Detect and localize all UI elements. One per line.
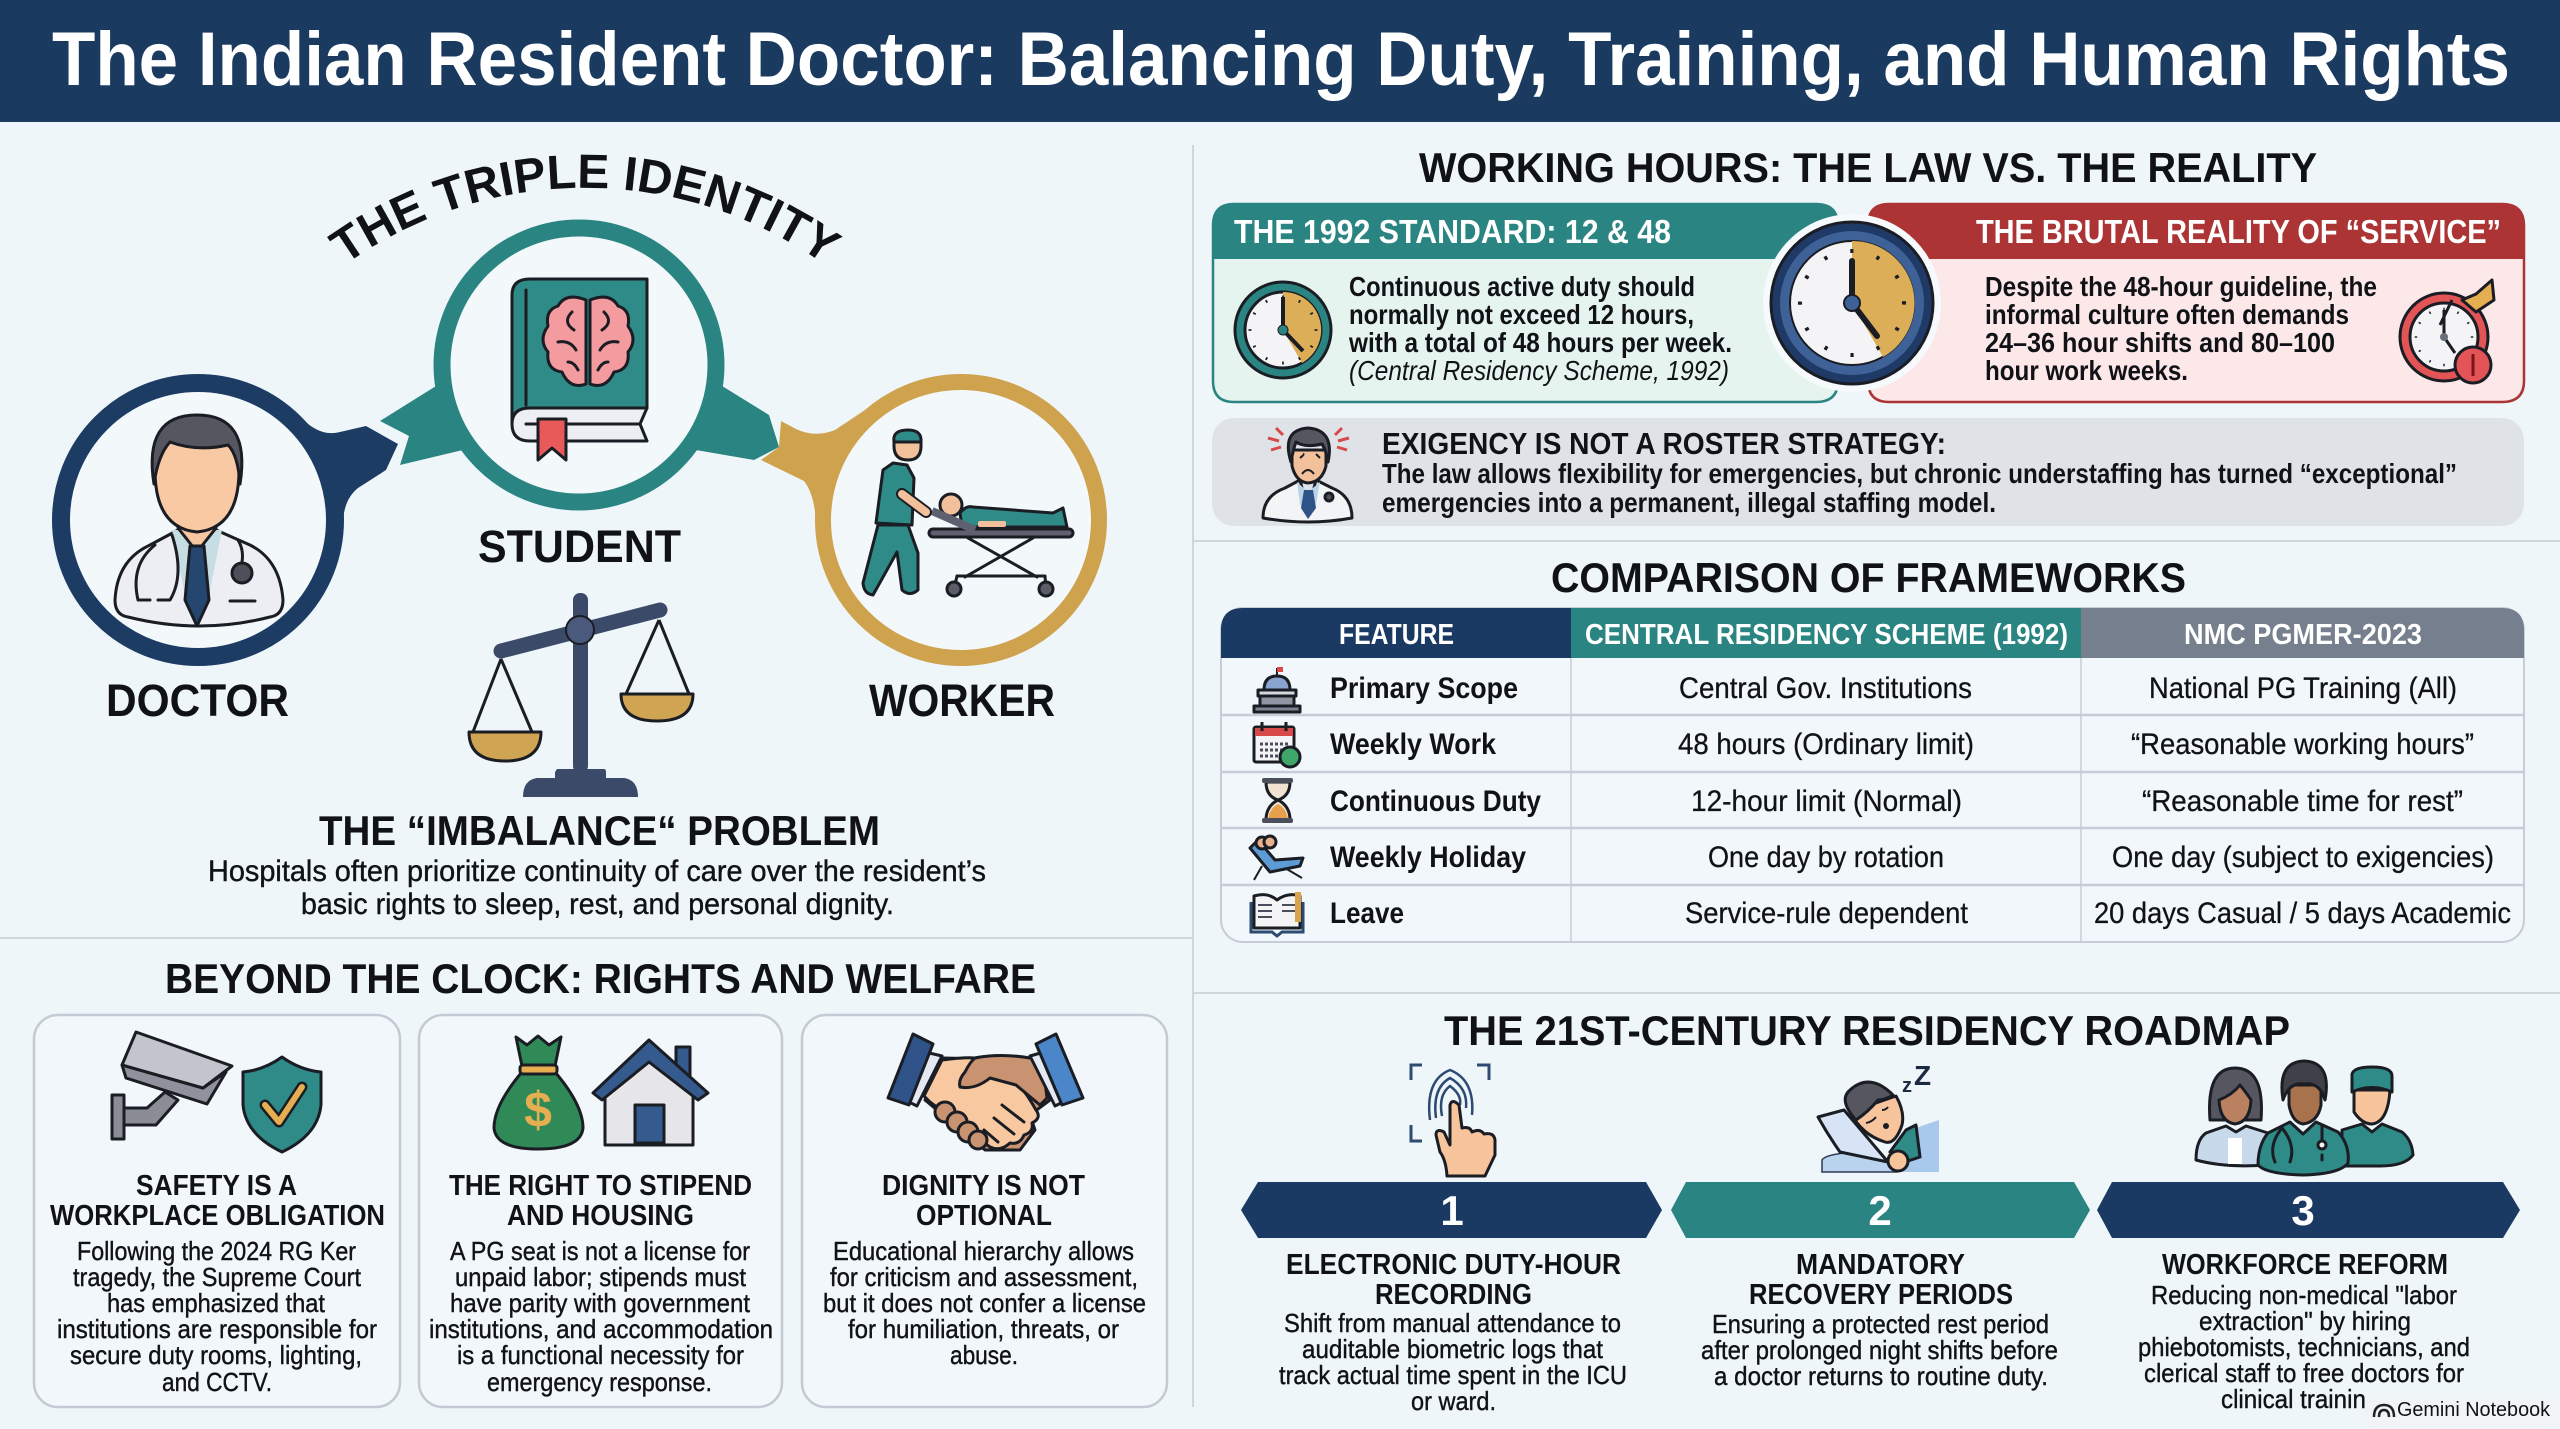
label: doctor: DOCTOR [106,675,289,726]
chevron: step 3: 3 [2291,1187,2315,1234]
row: continuous duty: Continuous Duty [1330,785,1541,818]
worker ring and connector [761,382,1099,658]
card heading: dignity: DIGNITY IS NOT [882,1170,1085,1202]
step 1 heading: ELECTRONIC DUTY-HOUR [1286,1249,1621,1281]
step 3 body: phiebotomists, technicians, and [2138,1332,2470,1362]
step 3 heading: WORKFORCE REFORM [2162,1249,2448,1281]
box: the brutal reality [1867,203,2524,402]
row: weekly holiday [1330,841,2494,874]
card body: dignity: but it does not confer a license [823,1288,1146,1318]
box body: 1992 standard: (Central Residency Scheme, 1992) [1349,355,1729,386]
card: stipend and housing [419,1015,782,1407]
card body: stipend: unpaid labor; stipends must [455,1262,747,1292]
row: weekly holiday: Weekly Holiday [1330,841,1526,874]
panel: residency roadmap [1241,1007,2520,1416]
panel: beyond the clock [34,955,1167,1407]
heading: comparison: COMPARISON OF FRAMEWORKS [1551,554,2186,601]
card body: dignity: for criticism and assessment, [830,1262,1138,1292]
card body: dignity: for humiliation, threats, or [848,1314,1119,1344]
card heading: safety: WORKPLACE OBLIGATION [50,1200,385,1232]
icon: worker pushing stretcher [863,430,1073,596]
row: weekly holiday: One day by rotation [1708,841,1944,874]
step 3 body: Reducing non-medical "labor [2151,1280,2457,1310]
text: imbalance description: basic rights to sleep, rest, and personal dignity. [301,888,894,921]
comparison table [1221,608,2524,942]
watermark: gemini notebook [2365,1393,2560,1429]
card body: stipend: is a functional necessity for [457,1340,744,1370]
step 3 body: clerical staff to free doctors for [2144,1358,2464,1388]
icon: sleeping doctor: z [1902,1075,1912,1097]
box body: 1992 standard: Continuous active duty should [1349,271,1695,302]
heading: working hours: WORKING HOURS: THE LAW VS. THE REALITY [1419,144,2317,191]
row: weekly work [1330,728,2474,761]
box body: brutal reality [1985,271,2377,386]
step 1 body: Shift from manual attendance to [1284,1308,1621,1338]
card body: stipend [429,1236,773,1397]
text: imbalance description [208,855,986,921]
step 2 heading: RECOVERY PERIODS [1749,1279,2013,1311]
card body: safety [57,1236,377,1397]
icon: money bag and house: $ [524,1082,552,1138]
card heading: dignity [882,1170,1085,1232]
card heading: dignity: OPTIONAL [916,1200,1052,1232]
icon: broken alarm clock [2400,280,2494,383]
card body: safety: tragedy, the Supreme Court [73,1262,362,1292]
row: primary scope: National PG Training (All) [2149,672,2457,705]
card heading: stipend: AND HOUSING [507,1200,694,1232]
card body: dignity: abuse. [950,1340,1018,1370]
table header [1221,608,2524,658]
icon: money bag and house [494,1036,708,1149]
heading: the triple identity (curved): THE TRIPLE IDENTITY [327,154,843,258]
box: the 1992 standard [1212,203,1838,402]
heading: the imbalance problem: THE “IMBALANCE“ PROBLEM [319,807,880,854]
box body: brutal reality: hour work weeks. [1985,355,2188,386]
step 1 body: or ward. [1411,1386,1496,1416]
card body: stipend: institutions, and accommodation [429,1314,773,1344]
card: safety [34,1015,400,1407]
step 2 heading: MANDATORY [1796,1249,1965,1281]
watermark: gemini notebook: Gemini Notebook [2397,1399,2551,1421]
row: weekly work: 48 hours (Ordinary limit) [1678,728,1974,761]
row: primary scope [1330,672,2457,705]
chevron: step 2 [1671,1182,2090,1238]
card body: safety: secure duty rooms, lighting, [70,1340,362,1370]
icon: open book [1251,892,1303,936]
card body: stipend: emergency response. [487,1367,712,1397]
card heading: stipend [449,1170,752,1232]
row: leave: Leave [1330,897,1404,930]
icon: sleeping doctor: Z [1914,1060,1931,1091]
icon: security camera and shield [112,1032,321,1152]
step 1 heading: RECORDING [1375,1279,1532,1311]
row: weekly work: “Reasonable working hours” [2131,728,2474,761]
step 2 body: a doctor returns to routine duty. [1714,1361,2048,1391]
card heading: safety: SAFETY IS A [136,1170,297,1202]
card body: dignity: Educational hierarchy allows [833,1236,1134,1266]
icon: calendar [1254,722,1300,767]
callout body: emergencies into a permanent, illegal staffing model. [1382,487,1996,518]
icon: book with brain [512,279,647,460]
step 1 body [1279,1308,1627,1416]
card body: safety: institutions are responsible for [57,1314,377,1344]
icon: stressed doctor [1263,428,1352,522]
row: leave: Service-rule dependent [1685,897,1969,930]
icon: teal clock [1235,282,1331,378]
row: weekly work: Weekly Work [1330,728,1496,761]
panel: the triple identity [52,154,1107,921]
heading: roadmap: THE 21ST-CENTURY RESIDENCY ROADMAP [1444,1007,2290,1054]
label: student: STUDENT [478,521,681,572]
card body: safety: and CCTV. [162,1367,272,1397]
row: leave: 20 days Casual / 5 days Academic [2094,897,2511,930]
box body: brutal reality: informal culture often demands [1985,299,2349,330]
icon: sleeping doctor [1818,1060,1939,1172]
card heading: safety [50,1170,385,1232]
step 2 body: Ensuring a protected rest period [1712,1309,2049,1339]
table header: CENTRAL RESIDENCY SCHEME (1992) [1585,619,2068,651]
label: worker: WORKER [869,675,1055,726]
chevron: step 1 [1241,1182,1662,1238]
text: imbalance description: Hospitals often prioritize continuity of care over the resident’s [208,855,986,888]
icon: healthcare team [2196,1061,2413,1175]
card body: safety: has emphasized that [107,1288,326,1318]
table header: NMC PGMER-2023 [2184,619,2422,651]
chevron: step 1: 1 [1440,1187,1464,1234]
row: continuous duty: 12-hour limit (Normal) [1691,785,1962,818]
icon: biometric fingerprint [1411,1065,1495,1176]
callout body [1382,458,2457,518]
callout: exigency [1212,418,2524,526]
box heading: brutal reality: THE BRUTAL REALITY OF “SERVICE” [1976,213,2501,250]
heading: beyond the clock: BEYOND THE CLOCK: RIGHTS AND WELFARE [165,955,1036,1002]
box body: brutal reality: Despite the 48-hour guideline, the [1985,271,2377,302]
title banner [0,0,2560,122]
step 3 body: clinical training. [2221,1384,2386,1414]
student ring and connectors [380,228,779,502]
box body: brutal reality: 24–36 hour shifts and 80–100 [1985,327,2335,358]
row: primary scope: Primary Scope [1330,672,1518,705]
icon: central clock [1763,214,1941,392]
box body: 1992 standard: with a total of 48 hours per week. [1348,327,1732,358]
box body: 1992 standard [1348,271,1732,386]
chevron: step 2: 2 [1868,1187,1892,1234]
icon: doctor [115,415,283,626]
row: continuous duty [1330,785,2463,818]
icon: balance scales [469,593,693,797]
callout heading: EXIGENCY IS NOT A ROSTER STRATEGY: [1382,426,1946,461]
card: dignity [802,1015,1167,1407]
box body: 1992 standard: normally not exceed 12 hours, [1349,299,1694,330]
card heading: stipend: THE RIGHT TO STIPEND [449,1170,752,1202]
step 3 body [2138,1280,2470,1414]
row: continuous duty: “Reasonable time for rest” [2142,785,2463,818]
chevron: step 3 [2097,1182,2520,1238]
step 2 body: after prolonged night shifts before [1701,1335,2058,1365]
step 3 body: extraction" by hiring [2199,1306,2411,1336]
card body: stipend: A PG seat is not a license for [450,1236,750,1266]
row: primary scope: Central Gov. Institutions [1679,672,1972,705]
card body: stipend: have parity with government [450,1288,751,1318]
step 2 heading [1749,1249,2013,1311]
box heading: 1992 standard: THE 1992 STANDARD: 12 & 48 [1234,213,1671,250]
panel: comparison of frameworks [1221,554,2524,942]
table header: FEATURE [1339,619,1454,651]
step 1 heading [1286,1249,1621,1311]
step 2 body [1701,1309,2058,1391]
row: weekly holiday: One day (subject to exigencies) [2112,841,2494,874]
icon: handshake [888,1034,1083,1150]
icon: government building [1254,667,1300,712]
step 1 body: auditable biometric logs that [1302,1334,1604,1364]
card body: dignity [823,1236,1146,1370]
icon: lounger [1250,836,1303,880]
doctor ring and connector [61,383,398,657]
step 1 body: track actual time spent in the ICU [1279,1360,1627,1390]
row: leave [1330,897,2511,930]
icon: hourglass [1262,778,1293,823]
card body: safety: Following the 2024 RG Ker [77,1236,356,1266]
panel: working hours [1212,144,2524,526]
